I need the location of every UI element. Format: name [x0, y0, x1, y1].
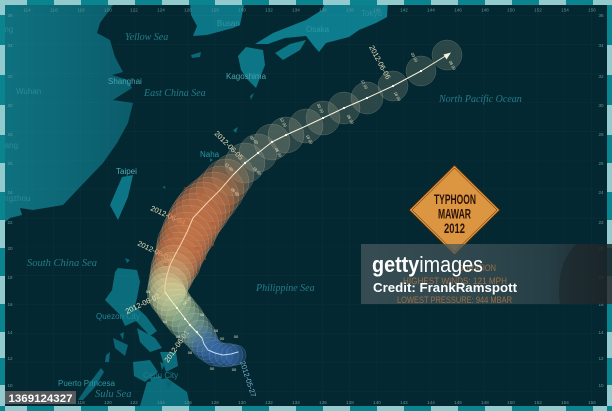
sea name labels: South China Sea	[27, 258, 97, 269]
date labels along track: 2012-06-01	[162, 328, 191, 364]
longitude and latitude axis labels: 128	[211, 400, 219, 405]
land: Japan Honshu	[255, 0, 388, 52]
small time tick labels on wind field: 06 00	[346, 114, 355, 126]
land: Taiwan	[110, 175, 133, 220]
sign diamond	[409, 165, 500, 255]
longitude and latitude axis labels: 140	[373, 400, 381, 405]
longitude and latitude axis labels: 146	[454, 8, 462, 12]
small time tick labels on wind field: 18 00	[252, 166, 263, 177]
longitude and latitude axis labels: 118	[77, 8, 85, 12]
longitude and latitude axis labels: 24	[598, 190, 604, 195]
land: Mindoro	[113, 338, 128, 356]
image id tag	[5, 391, 76, 405]
longitude and latitude axis labels: 144	[427, 8, 435, 12]
border: bottom strip	[0, 406, 612, 411]
longitude and latitude axis labels: 24	[7, 190, 13, 195]
wind field: blue circles	[188, 326, 246, 367]
mottled tick marks inside orange wind field: 00	[198, 192, 203, 197]
sign text: typhoon: TYPHOON	[434, 192, 476, 207]
longitude and latitude axis labels: 152	[534, 8, 542, 12]
city name labels: Naha	[200, 150, 220, 159]
date labels along track: 2012-06-04	[149, 204, 187, 227]
longitude and latitude axis labels: 138	[346, 8, 354, 12]
sea name labels: East China Sea	[143, 88, 206, 99]
storm statistics text: HIGHEST WINDS: 121 MPH	[403, 276, 507, 287]
longitude and latitude axis labels: 32	[598, 74, 604, 79]
arrowhead	[444, 52, 451, 60]
longitude and latitude axis labels: 22	[598, 220, 604, 225]
longitude and latitude axis labels: 16	[598, 302, 604, 307]
watermark background	[361, 244, 612, 304]
city name labels: Taipei	[116, 167, 137, 176]
longitude and latitude axis labels: 20	[7, 246, 13, 251]
longitude and latitude axis labels: 136	[319, 8, 327, 12]
date labels along track: 2012-06-02	[124, 291, 161, 316]
longitude and latitude axis labels: 126	[184, 8, 192, 12]
mottled tick marks inside orange wind field: 06	[194, 270, 199, 275]
small time tick labels on wind field: 12 00	[360, 79, 369, 91]
longitude and latitude axis labels: 130	[238, 8, 246, 12]
id number: 1369124327	[8, 393, 72, 405]
longitude and latitude axis labels: 30	[7, 103, 13, 108]
mottled tick marks inside orange wind field: 06	[157, 254, 162, 259]
longitude and latitude axis labels: 134	[292, 8, 300, 12]
longitude and latitude axis labels: 142	[400, 400, 408, 405]
wind field: northern gray circles	[225, 40, 462, 183]
city name labels: Quezon City	[96, 312, 140, 321]
longitude and latitude axis labels: 152	[534, 400, 542, 405]
typhoon warning sign	[409, 165, 500, 255]
small time tick labels on wind field: 00 00	[316, 103, 325, 115]
storm statistics text: LOWEST PRESSURE: 944 MBAR	[397, 295, 512, 306]
mottled tick marks inside orange wind field: 00	[195, 246, 200, 251]
sea name labels	[27, 32, 522, 400]
longitude and latitude axis labels: 12	[7, 356, 13, 361]
longitude and latitude axis labels: 154	[561, 400, 569, 405]
longitude and latitude axis labels: 126	[184, 400, 192, 405]
longitude and latitude axis labels: 116	[50, 400, 58, 405]
longitude and latitude axis labels: 120	[104, 400, 112, 405]
small time tick labels on wind field: 06	[146, 289, 151, 294]
longitude and latitude axis labels: 148	[481, 8, 489, 12]
longitude and latitude axis labels: 32	[7, 74, 13, 79]
watermark panel	[361, 244, 612, 306]
mottled tick marks inside orange wind field: 06	[164, 226, 169, 231]
track position dots	[176, 70, 422, 333]
small time tick labels on wind field: 03 00	[410, 52, 419, 64]
longitude and latitude axis labels: 134	[292, 400, 300, 405]
mottled tick marks inside orange wind field: 06	[221, 214, 226, 219]
track line with arrow	[165, 55, 447, 355]
longitude and latitude axis labels: 122	[130, 400, 138, 405]
small time tick labels on wind field: 00	[234, 334, 239, 339]
small time tick labels on wind field: 12 00	[279, 117, 288, 129]
date labels along track	[124, 44, 393, 398]
mottled tick marks inside orange wind field: 06	[202, 256, 207, 261]
sign inner outline	[412, 168, 497, 252]
id background	[5, 391, 76, 404]
storm statistics text: DURATION	[458, 263, 496, 274]
date labels along track: 2012-06-03	[136, 239, 174, 263]
longitude and latitude axis labels: 150	[507, 8, 515, 12]
date labels along track: 2012-06-05	[213, 129, 245, 162]
mottled tick marks inside orange wind field: 00	[169, 232, 174, 237]
longitude and latitude axis labels: 114	[23, 400, 31, 405]
longitude and latitude axis labels: 122	[130, 8, 138, 12]
longitude and latitude axis labels: 124	[157, 8, 165, 12]
longitude and latitude axis labels: 156	[588, 8, 596, 12]
longitude and latitude axis labels: 18	[598, 275, 604, 280]
mottled tick marks inside orange wind field: 06	[184, 186, 189, 191]
date labels along track: 2012-05-27	[238, 360, 258, 398]
city name labels	[0, 9, 382, 388]
border: left strip	[0, 5, 5, 406]
longitude and latitude axis labels: 144	[427, 400, 435, 405]
longitude and latitude axis labels: 118	[77, 400, 85, 405]
sea name labels: North Pacific Ocean	[438, 94, 522, 105]
city name labels: Cebu City	[143, 371, 178, 380]
sea name labels: Yellow Sea	[125, 32, 168, 43]
small time tick labels on wind field: 00	[210, 366, 215, 371]
longitude and latitude axis labels: 36	[598, 13, 604, 18]
longitude and latitude axis labels: 148	[481, 400, 489, 405]
longitude and latitude axis labels: 34	[7, 43, 13, 48]
longitude and latitude axis labels: 26	[7, 161, 13, 166]
small time tick labels on wind field: 06	[163, 319, 168, 324]
longitude and latitude axis labels: 142	[400, 8, 408, 12]
land: mainland China	[0, 0, 133, 224]
land: Mindanao	[140, 378, 190, 406]
small time tick labels on wind field: 18 00	[393, 91, 402, 103]
typhoon track	[146, 40, 462, 372]
mottled tick marks inside orange wind field: 06	[160, 240, 165, 245]
sign text: year: 2012	[444, 221, 465, 236]
land: Luzon	[105, 268, 157, 336]
border: right strip	[607, 5, 612, 406]
land: small islands	[105, 258, 172, 389]
mottled tick marks inside orange wind field: 06	[228, 201, 233, 206]
longitude and latitude axis labels: 132	[265, 400, 273, 405]
longitude and latitude axis labels: 22	[7, 220, 13, 225]
small time tick labels on wind field: 06 00	[230, 187, 241, 198]
city name labels: Kagoshima	[226, 72, 267, 81]
land: Palawan	[78, 368, 104, 400]
mottled tick marks inside orange wind field: 06	[176, 199, 181, 204]
longitude and latitude axis labels: 14	[598, 330, 604, 335]
longitude and latitude axis labels: 132	[265, 8, 273, 12]
longitude and latitude axis labels: 20	[598, 246, 604, 251]
city name labels: Shanghai	[108, 77, 142, 86]
storm statistics text	[397, 263, 512, 306]
longitude and latitude axis labels: 14	[7, 330, 13, 335]
small time tick labels on wind field: 06	[200, 312, 205, 317]
city name labels: Osaka	[306, 25, 330, 34]
wind field: orange circles	[149, 154, 254, 301]
longitude and latitude axis labels: 124	[157, 400, 165, 405]
sea name labels: Philippine Sea	[255, 283, 315, 294]
small time tick labels on wind field: 06	[188, 350, 193, 355]
longitude and latitude axis labels: 140	[373, 8, 381, 12]
land: Visayas	[133, 328, 178, 392]
small time tick labels on wind field: 00	[232, 367, 237, 372]
longitude and latitude axis labels: 114	[23, 8, 31, 12]
longitude and latitude axis labels: 136	[319, 400, 327, 405]
longitude and latitude axis labels: 156	[588, 400, 596, 405]
longitude and latitude axis labels: 12	[598, 356, 604, 361]
longitude and latitude axis labels: 28	[7, 132, 13, 137]
longitude and latitude axis labels: 16	[7, 302, 13, 307]
mottled tick marks inside orange wind field: 00	[211, 221, 216, 226]
land: Shikoku	[275, 40, 306, 60]
land: Jeju and Ryukyu islands	[163, 52, 254, 189]
mottled tick marks inside orange wind field: 00	[164, 262, 169, 267]
longitude and latitude axis labels: 120	[104, 8, 112, 12]
longitude and latitude axis labels: 34	[598, 43, 604, 48]
border: top strip	[0, 0, 612, 5]
small time tick labels on wind field: 06 00	[448, 60, 457, 72]
longitude and latitude axis labels: 36	[7, 13, 13, 18]
small time tick labels on wind field: 06 00	[274, 147, 283, 159]
longitude and latitude axis labels: 116	[50, 8, 58, 12]
small time tick labels on wind field	[146, 52, 457, 372]
small time tick labels on wind field: 18 00	[305, 134, 314, 146]
small time tick labels on wind field: 06 06	[182, 295, 192, 306]
mottled tick marks inside orange wind field: 06	[170, 212, 175, 217]
longitude and latitude axis labels: 26	[598, 161, 604, 166]
longitude and latitude axis labels: 10	[7, 383, 13, 388]
mottled tick marks inside orange wind field: 06	[210, 242, 215, 247]
longitude and latitude axis labels: 150	[507, 400, 515, 405]
map: land masses	[0, 0, 388, 406]
small time tick labels on wind field: 00 00	[249, 135, 260, 146]
city name labels: Puerto Princesa	[58, 379, 115, 388]
watermark dark shape	[559, 244, 612, 304]
longitude and latitude axis labels: 130	[238, 400, 246, 405]
small time tick labels on wind field: 12 00	[224, 162, 235, 173]
longitude and latitude axis labels: 18	[7, 275, 13, 280]
longitude and latitude axis labels: 128	[211, 8, 219, 12]
longitude and latitude axis labels: 146	[454, 400, 462, 405]
small time tick labels on wind field: 00	[220, 336, 225, 341]
longitude and latitude axis labels: 28	[598, 132, 604, 137]
mottled tick marks inside orange wind field	[157, 186, 233, 275]
longitude and latitude axis labels: 10	[598, 383, 604, 388]
city name labels: Tokyo	[361, 9, 382, 18]
longitude and latitude axis labels: 154	[561, 8, 569, 12]
watermark logo: gettyimages	[372, 252, 483, 277]
sea name labels: Sulu Sea	[95, 389, 131, 400]
mottled tick marks inside orange wind field: 06	[216, 228, 221, 233]
city name labels: Busan	[217, 19, 240, 28]
wind field: pale yellow and green circles	[147, 266, 216, 352]
small time tick labels on wind field: 06	[176, 334, 181, 339]
land: Kyushu	[238, 47, 265, 88]
small time tick labels on wind field: 06	[214, 328, 219, 333]
longitude and latitude axis labels: 30	[598, 103, 604, 108]
watermark credit: Credit: FrankRamspott	[373, 281, 518, 295]
city name labels: Wuhan	[16, 87, 41, 96]
date labels along track: 2012-06-06	[367, 44, 393, 81]
sign text: mawar: MAWAR	[438, 206, 471, 222]
land: Korea	[190, 0, 245, 36]
longitude and latitude axis labels: 138	[346, 400, 354, 405]
